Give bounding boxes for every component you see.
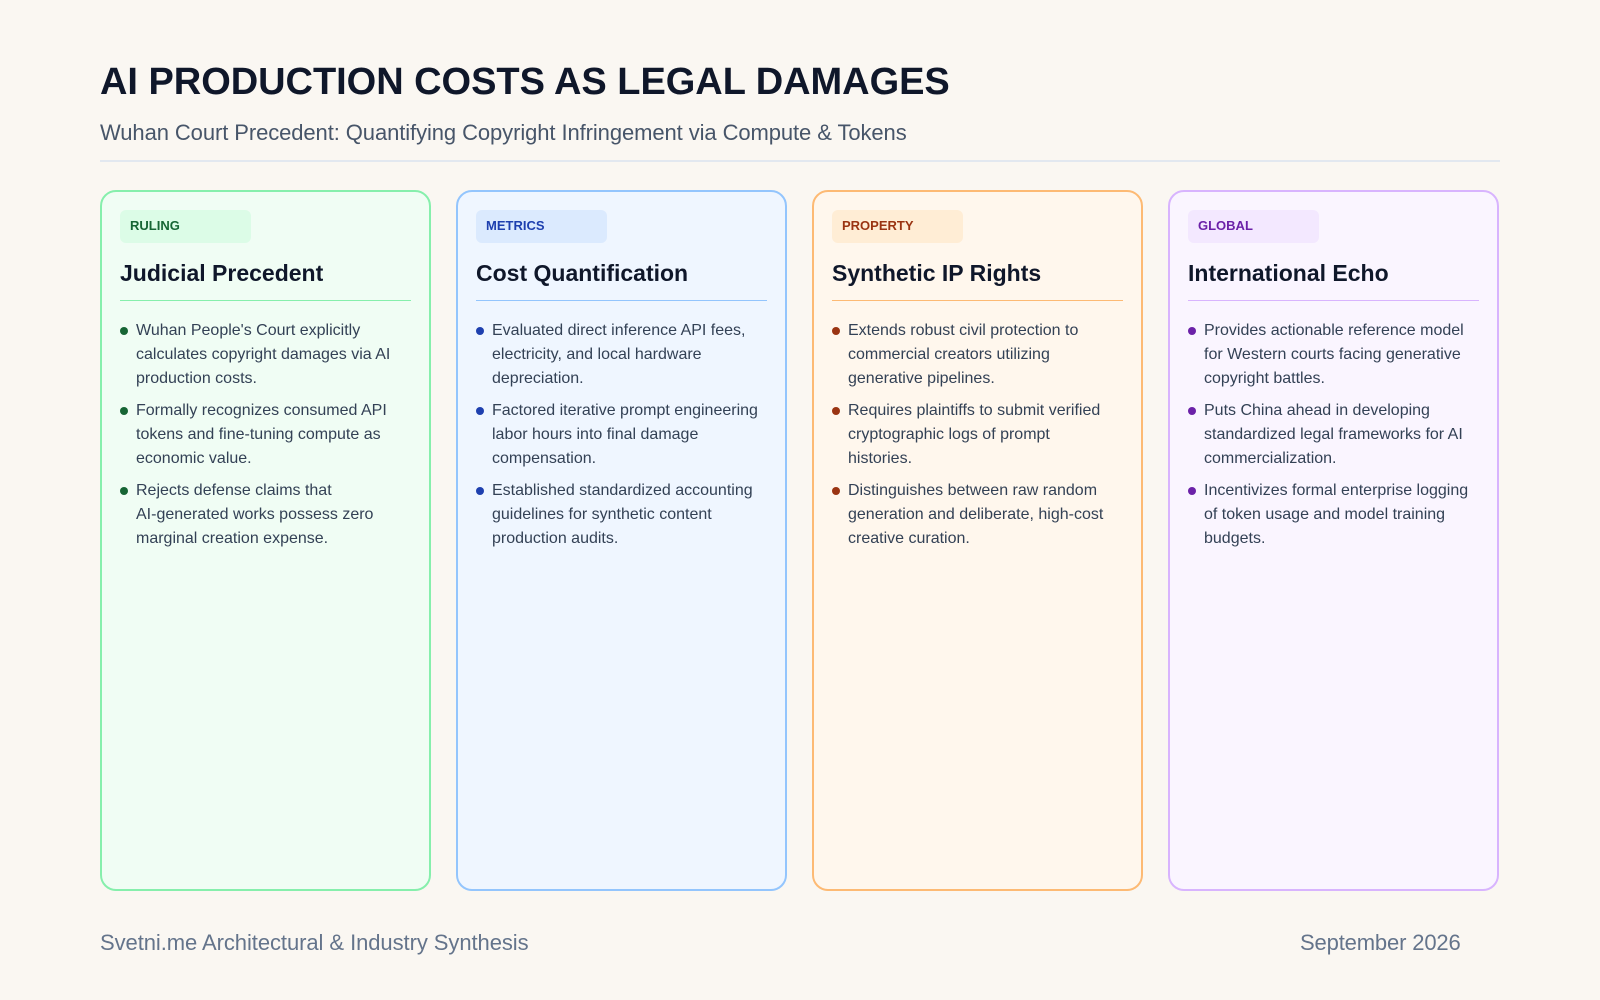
bullet: enterprise logging: of token usage and model training	[1204, 506, 1445, 523]
bullet: deliberate curation: creative curation.	[848, 530, 970, 547]
bullet: defense rejected: marginal creation expense.	[136, 530, 328, 547]
bullet: enterprise logging	[1188, 482, 1468, 547]
badge: ruling: RULING	[130, 218, 180, 233]
bullet: reference model: for Western courts facing generative	[1204, 346, 1461, 363]
bullet: defense rejected: AI-generated works possess zero	[136, 506, 373, 523]
panel heading: Judicial Precedent	[120, 260, 323, 286]
bullet: accounting guidelines: guidelines for synthetic content	[492, 506, 712, 523]
badge: ruling	[120, 210, 251, 243]
bullet: economic value	[120, 402, 387, 467]
badge: metrics	[476, 210, 607, 243]
bullet: civil protection	[832, 322, 1078, 387]
bullet: enterprise logging: Incentivizes formal enterprise logging	[1204, 482, 1468, 499]
panel heading: Synthetic IP Rights	[832, 260, 1041, 286]
bullet: damages calculation: Wuhan People's Court explicitly	[136, 322, 360, 339]
bullet: economic value: tokens and fine-tuning compute as	[136, 426, 381, 443]
bullet: reference model: copyright battles.	[1204, 370, 1325, 387]
panel: synthetic IP rights	[812, 190, 1143, 891]
bullet: defense rejected: Rejects defense claims that	[136, 482, 332, 499]
bullet: labor hours: compensation.	[492, 450, 596, 467]
bullet: reference model: Provides actionable reference model	[1204, 322, 1464, 339]
bullet: accounting guidelines	[476, 482, 753, 547]
panel: international echo	[1168, 190, 1499, 891]
bullet: direct costs: electricity, and local hardware	[492, 346, 702, 363]
bullet: deliberate curation: generation and deliberate, high-cost	[848, 506, 1103, 523]
bullet: direct costs: depreciation.	[492, 370, 584, 387]
footer: source: Svetni.me Architectural & Industry Synthesis	[100, 930, 529, 955]
footer: date: September 2026	[1300, 930, 1461, 955]
bullet: direct costs: Evaluated direct inference API fees,	[492, 322, 745, 339]
badge: global: GLOBAL	[1198, 218, 1253, 233]
bullet: deliberate curation: Distinguishes between raw random	[848, 482, 1097, 499]
bullet: labor hours	[476, 402, 758, 467]
bullet: verified logs: histories.	[848, 450, 912, 467]
panel heading: International Echo	[1188, 260, 1389, 286]
badge: global	[1188, 210, 1319, 243]
panel heading: Cost Quantification	[476, 260, 688, 286]
badge: property: PROPERTY	[842, 218, 914, 233]
title: AI PRODUCTION COSTS AS LEGAL DAMAGES	[100, 61, 950, 103]
bullet: accounting guidelines: production audits.	[492, 530, 618, 547]
subtitle: Wuhan Court Precedent: Quantifying Copyright Infringement via Compute & Tokens	[100, 120, 907, 145]
bullet: civil protection: generative pipelines.	[848, 370, 995, 387]
bullet: deliberate curation	[832, 482, 1104, 547]
bullet: verified logs: Requires plaintiffs to submit verified	[848, 402, 1100, 419]
bullet: defense rejected	[120, 482, 373, 547]
badge: property	[832, 210, 963, 243]
bullet: civil protection: Extends robust civil protection to	[848, 322, 1078, 339]
bullet: labor hours: Factored iterative prompt engineering	[492, 402, 758, 419]
panel: cost quantification	[456, 190, 787, 891]
bullet: damages calculation: calculates copyright damages via AI	[136, 346, 390, 363]
bullet: civil protection: commercial creators utilizing	[848, 346, 1050, 363]
bullet: damages calculation	[120, 322, 390, 387]
bullet: enterprise logging: budgets.	[1204, 530, 1265, 547]
bullet: legal frameworks: commercialization.	[1204, 450, 1336, 467]
panel: judicial precedent	[100, 190, 431, 891]
badge: metrics: METRICS	[486, 218, 544, 233]
bullet: verified logs: cryptographic logs of prompt	[848, 426, 1050, 443]
bullet: economic value: economic value.	[136, 450, 252, 467]
bullet: reference model	[1188, 322, 1464, 387]
bullet: verified logs	[832, 402, 1100, 467]
bullet: direct costs	[476, 322, 745, 387]
bullet: accounting guidelines: Established standardized accounting	[492, 482, 753, 499]
bullet: legal frameworks: standardized legal frameworks for AI	[1204, 426, 1463, 443]
bullet: legal frameworks	[1188, 402, 1463, 467]
bullet: labor hours: labor hours into final damage	[492, 426, 698, 443]
bullet: economic value: Formally recognizes consumed API	[136, 402, 387, 419]
bullet: legal frameworks: Puts China ahead in developing	[1204, 402, 1430, 419]
bullet: damages calculation: production costs.	[136, 370, 257, 387]
